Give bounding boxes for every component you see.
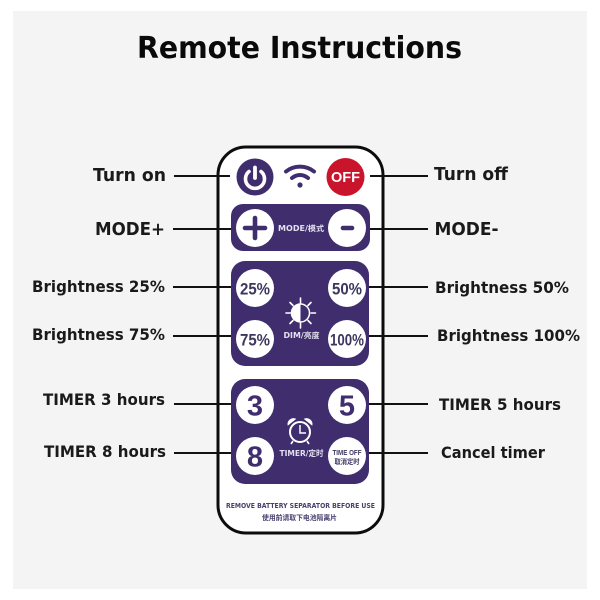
label: timer 5 hours: TIMER 5 hours [439, 395, 561, 414]
label: turn off: Turn off [434, 164, 508, 185]
remote body [218, 147, 383, 533]
button: 75 percent: 75% [240, 330, 270, 350]
button: time off: TIME OFF [332, 450, 362, 457]
label: mode plus: MODE+ [95, 219, 165, 240]
button: off: OFF [331, 169, 360, 186]
label: cancel timer: Cancel timer [441, 443, 545, 462]
label: turn on: Turn on [93, 165, 166, 186]
button: minus [328, 209, 366, 247]
title: Remote Instructions [137, 31, 462, 66]
label: timer 8 hours: TIMER 8 hours [44, 442, 166, 461]
button: 25 percent: 25% [240, 280, 270, 298]
icon: alarm clock [288, 419, 312, 444]
button: plus [236, 209, 274, 247]
label: brightness 75: Brightness 75% [32, 325, 165, 344]
panel: mode [231, 204, 370, 251]
label: timer 3 hours: TIMER 3 hours [43, 390, 165, 409]
label: brightness 25: Brightness 25% [32, 277, 165, 296]
button: 8 hours: 8 [247, 442, 263, 474]
icon: power button [236, 158, 274, 196]
button: 5 hours: 5 [339, 390, 355, 422]
button: off [326, 158, 364, 196]
icon: wifi [286, 167, 314, 188]
panel: timer [231, 379, 369, 484]
panel: dim [231, 261, 369, 366]
label: brightness 50: Brightness 50% [435, 278, 569, 297]
button: time off [328, 437, 366, 475]
text: timer caption: TIMER/定时 [280, 448, 324, 458]
leader lines [173, 176, 428, 453]
text: mode caption: MODE/模式 [278, 223, 325, 233]
right labels [434, 164, 580, 462]
label: brightness 100: Brightness 100% [437, 326, 580, 345]
icon: sun [286, 298, 316, 328]
button: 50 percent: 50% [332, 280, 362, 298]
left labels [32, 165, 166, 461]
button: 100 percent: 100% [330, 330, 364, 350]
button: time off: 取消定时 [334, 457, 360, 466]
button: 3 hours: 3 [247, 390, 263, 422]
text: battery notice chinese: 使用前请取下电池隔离片 [262, 512, 337, 522]
text: battery notice english: REMOVE BATTERY SEPARATOR BEFORE USE [226, 502, 375, 510]
text: dim caption: DIM/亮度 [284, 330, 320, 340]
label: mode minus: MODE- [434, 219, 498, 240]
